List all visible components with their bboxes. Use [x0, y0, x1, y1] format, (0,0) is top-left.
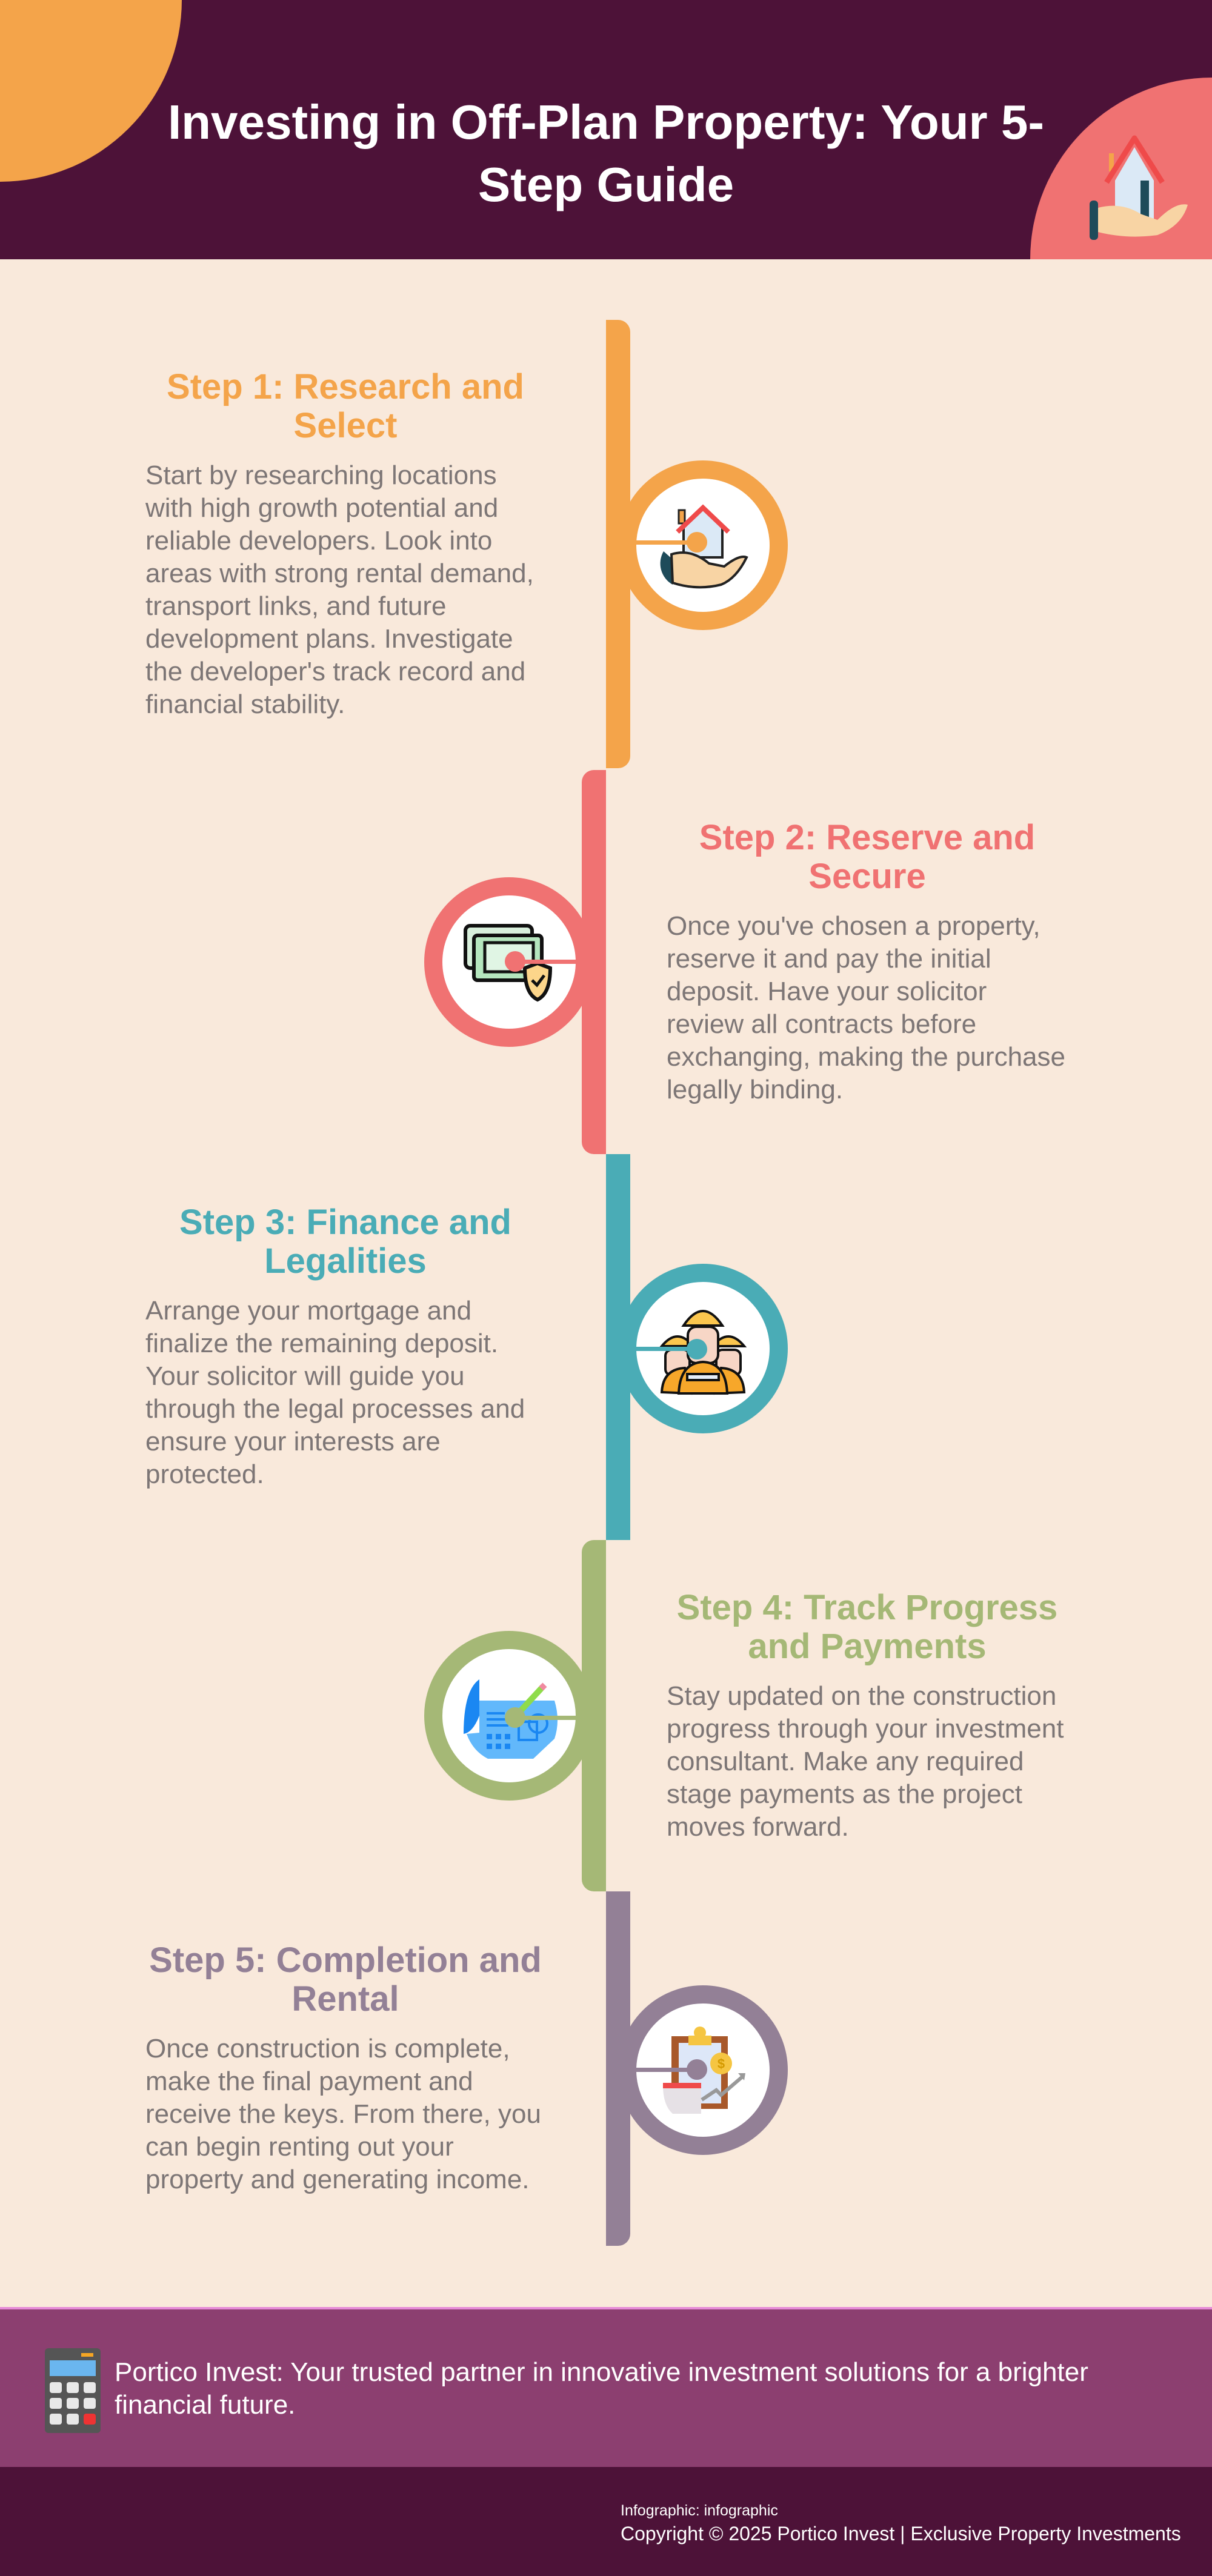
icon: construction workers: [662, 1311, 744, 1393]
step 4 text: stage payments as the project: [667, 1779, 1022, 1809]
step 1 text: reliable developers. Look into: [145, 526, 492, 555]
step 5 text: Step 5: Completion and: [149, 1940, 542, 1980]
header: [0, 0, 1212, 259]
footer tagline: [115, 2357, 1088, 2420]
footer tagline: financial future.: [115, 2390, 295, 2420]
step 1 text: financial stability.: [145, 689, 345, 719]
step 3 text: through the legal processes and: [145, 1394, 525, 1424]
step 4 text: and Payments: [748, 1626, 987, 1666]
step 5 text: make the final payment and: [145, 2066, 473, 2096]
step 3 marker: [606, 1154, 779, 1540]
step 1 text: transport links, and future: [145, 591, 446, 620]
step 5 marker: [606, 1891, 779, 2246]
step 3 text: protected.: [145, 1459, 264, 1489]
title: Investing in Off-Plan Property: Your 5-: [168, 95, 1044, 149]
step 3 text: ensure your interests are: [145, 1427, 441, 1456]
icon: clipboard with coin and calendar: $: [718, 2056, 725, 2071]
step 5 text: property and generating income.: [145, 2165, 530, 2194]
step 1 text: Step 1: Research and: [167, 367, 524, 406]
step 2 text: legally binding.: [667, 1075, 843, 1104]
title: [168, 95, 1044, 211]
connector: [636, 2059, 707, 2080]
icon: clipboard with coin and calendar: [663, 2027, 745, 2114]
step 2 text: [667, 818, 1065, 1104]
icon: blueprint: [464, 1679, 558, 1759]
step 1 marker: [606, 320, 779, 768]
step 5 text: Once construction is complete,: [145, 2034, 510, 2063]
credits: Copyright © 2025 Portico Invest | Exclusive Property Investments: [621, 2523, 1181, 2544]
connector: [505, 1707, 576, 1728]
step 2 text: reserve it and pay the initial: [667, 944, 991, 973]
step 1 text: Select: [294, 406, 397, 445]
icon: money and shield: [465, 926, 550, 1000]
connector: [636, 532, 707, 553]
icon: calculator: [45, 2348, 101, 2433]
bottom bar: [0, 2467, 1212, 2576]
step 2 text: exchanging, making the purchase: [667, 1042, 1065, 1071]
step 3 text: Arrange your mortgage and: [145, 1296, 471, 1326]
step 2 text: review all contracts before: [667, 1009, 976, 1038]
step 2 text: Once you've chosen a property,: [667, 911, 1041, 940]
connector: [636, 1339, 707, 1359]
footer tagline: Portico Invest: Your trusted partner in innovative investment solutions for a brighter: [115, 2357, 1088, 2387]
step 5 text: Rental: [291, 1979, 399, 2019]
step 2 text: Secure: [808, 857, 926, 895]
icon: house in hand: [661, 508, 747, 587]
footer band: [0, 2307, 1212, 2467]
credits: Infographic: infographic: [621, 2502, 778, 2519]
step 1 text: the developer's track record and: [145, 657, 525, 686]
credits: [621, 2502, 1181, 2544]
decorative pink circle with house icon: [1030, 78, 1212, 259]
step 3 text: Legalities: [264, 1241, 427, 1281]
step 1 text: areas with strong rental demand,: [145, 559, 534, 588]
step 4 text: Step 4: Track Progress: [677, 1587, 1057, 1627]
step 5 text: [145, 1940, 542, 2194]
step 4 text: Stay updated on the construction: [667, 1681, 1056, 1711]
step 2 marker: [433, 770, 606, 1154]
step 1 text: development plans. Investigate: [145, 624, 513, 653]
step 2 text: deposit. Have your solicitor: [667, 977, 987, 1006]
title: Step Guide: [478, 158, 734, 211]
step 4 text: [667, 1587, 1064, 1842]
step 3 text: finalize the remaining deposit.: [145, 1329, 498, 1358]
step 5 text: receive the keys. From there, you: [145, 2099, 541, 2129]
step 4 marker: [433, 1540, 606, 1891]
step 5 text: can begin renting out your: [145, 2132, 454, 2162]
connector: [505, 951, 576, 972]
step 3 text: Your solicitor will guide you: [145, 1361, 465, 1391]
step 3 text: [145, 1203, 525, 1489]
step 3 text: Step 3: Finance and: [179, 1203, 511, 1242]
step 4 text: consultant. Make any required: [667, 1746, 1024, 1776]
step 1 text: with high growth potential and: [145, 493, 498, 522]
step 1 text: [145, 367, 534, 719]
step 4 text: progress through your investment: [667, 1713, 1064, 1744]
step 4 text: moves forward.: [667, 1811, 849, 1842]
decorative orange circle: [0, 0, 182, 182]
step 2 text: Step 2: Reserve and: [699, 818, 1035, 857]
step 1 text: Start by researching locations: [145, 460, 497, 490]
